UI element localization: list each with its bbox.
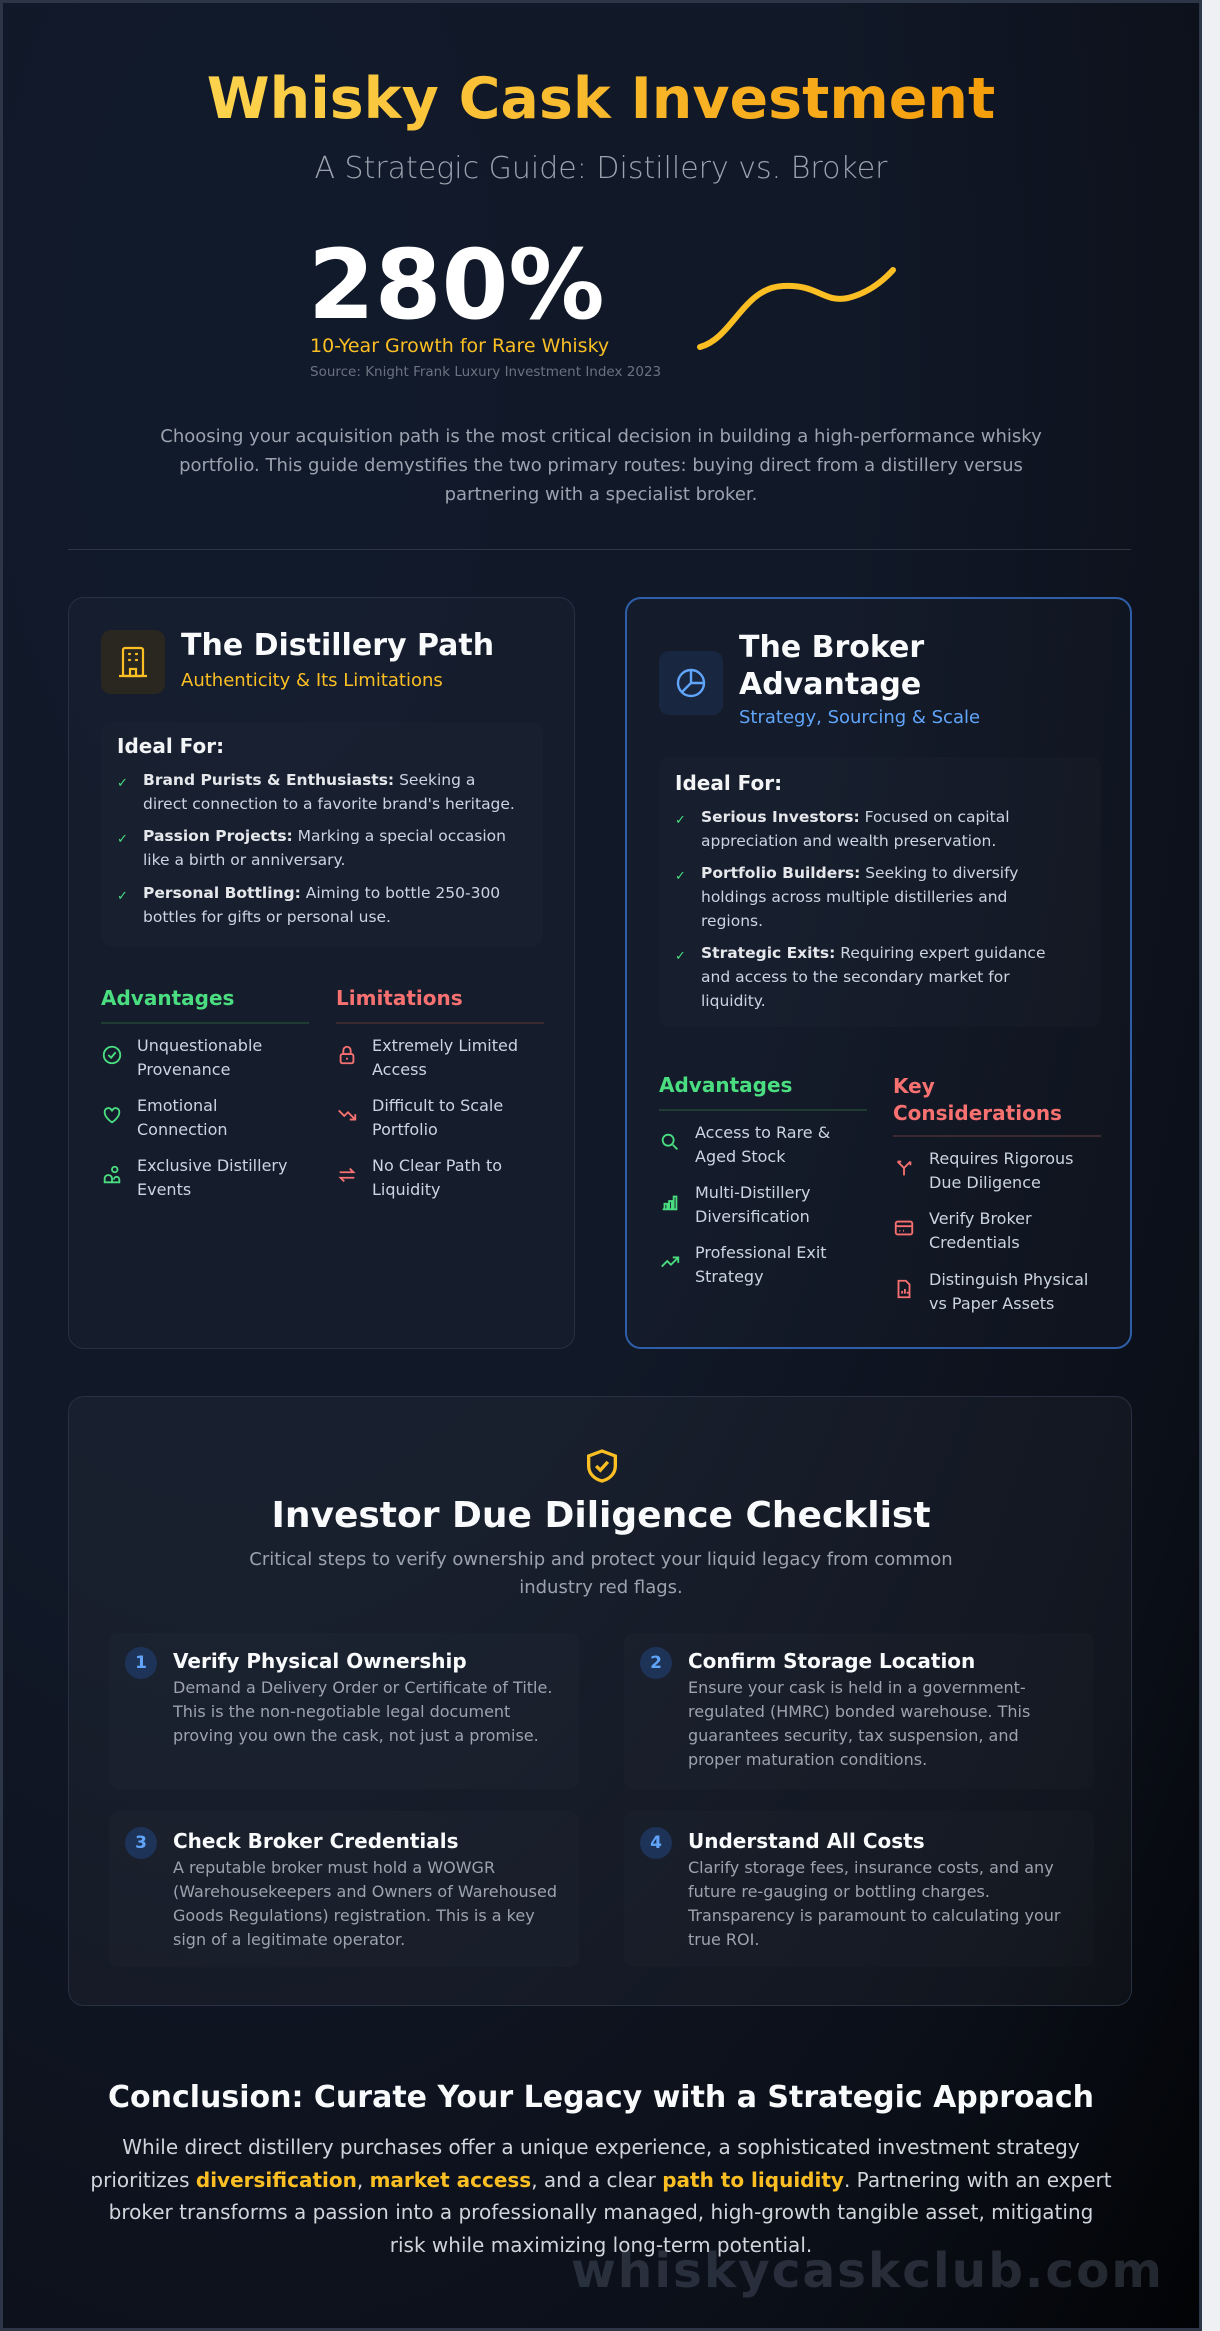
intro paragraph — [160, 426, 1042, 505]
conclusion text: risk while maximizing long-term potential. — [390, 2232, 812, 2256]
key considerations column: Due Diligence — [929, 1173, 1041, 1192]
panel: due diligence checklist: industry red flags. — [519, 1577, 683, 1598]
chart: growth line — [697, 267, 896, 350]
panel: broker advantage — [625, 597, 1132, 1349]
advantages column: Aged Stock — [695, 1147, 785, 1166]
step 1: proving you own the cask, not just a promise. — [173, 1726, 539, 1745]
key considerations column: Credentials — [929, 1233, 1020, 1252]
conclusion heading: Conclusion: Curate Your Legacy with a Strategic Approach — [108, 2080, 1094, 2115]
advantages column — [101, 986, 309, 1199]
step 4: 4 — [650, 1833, 662, 1853]
limitations column: Liquidity — [372, 1180, 440, 1199]
conclusion text: While direct distillery purchases offer a unique experience, a sophisticated investment strategy — [122, 2135, 1080, 2159]
ideal for box: ✓ — [675, 949, 686, 964]
conclusion text — [90, 2135, 1112, 2256]
step 2 — [624, 1633, 1094, 1789]
ideal for box: Passion Projects: Marking a special occasion — [143, 827, 506, 845]
advantages column: Unquestionable — [137, 1036, 262, 1055]
advantages column: Access to Rare & — [695, 1123, 830, 1142]
advantages column — [659, 1073, 867, 1286]
ideal for box: ✓ — [117, 832, 128, 847]
step 2: proper maturation conditions. — [688, 1750, 927, 1769]
step 4 — [624, 1811, 1094, 1967]
key considerations column: Verify Broker — [929, 1209, 1032, 1228]
advantages column: Provenance — [137, 1060, 230, 1079]
step 2: guarantees security, tax suspension, and — [688, 1726, 1019, 1745]
limitations column: Extremely Limited — [372, 1036, 518, 1055]
key considerations column: vs Paper Assets — [929, 1294, 1054, 1313]
step 3: A reputable broker must hold a WOWGR — [173, 1858, 495, 1877]
advantages column: Advantages — [659, 1073, 792, 1097]
advantages column: Advantages — [101, 986, 234, 1010]
limitations column: Access — [372, 1060, 427, 1079]
ideal for box: like a birth or anniversary. — [143, 851, 345, 869]
advantages column: Emotional — [137, 1096, 217, 1115]
ideal for box: Strategic Exits: Requiring expert guidance — [701, 944, 1045, 962]
ideal for box: liquidity. — [701, 992, 766, 1010]
icon: building — [101, 630, 165, 694]
intro paragraph: portfolio. This guide demystifies the two primary routes: buying direct from a distillery versus — [179, 455, 1023, 476]
ideal for box — [659, 757, 1101, 1027]
key considerations column — [893, 1074, 1101, 1313]
step 4: true ROI. — [688, 1930, 759, 1949]
ideal for box: Ideal For: — [675, 771, 782, 795]
ideal for box: ✓ — [675, 813, 686, 828]
step 2: Ensure your cask is held in a government- — [688, 1678, 1026, 1697]
step 4: Understand All Costs — [688, 1829, 925, 1853]
conclusion text: broker transforms a passion into a professionally managed, high-growth tangible asset, mitigating — [109, 2200, 1093, 2224]
stat: 280% — [308, 229, 661, 380]
stat: 280%: 10-Year Growth for Rare Whisky — [310, 335, 609, 357]
ideal for box: direct connection to a favorite brand's heritage. — [143, 795, 515, 813]
step 3: 3 — [135, 1833, 147, 1853]
heading — [739, 630, 924, 702]
step 4: Clarify storage fees, insurance costs, and any — [688, 1858, 1054, 1877]
limitations column: No Clear Path to — [372, 1156, 502, 1175]
step 3: (Warehousekeepers and Owners of Warehoused — [173, 1882, 557, 1901]
heading: The Broker — [739, 630, 924, 665]
advantages column: Strategy — [695, 1267, 764, 1286]
step 1 — [109, 1633, 579, 1789]
advantages column: Professional Exit — [695, 1243, 827, 1262]
stat: 280%: 280% — [308, 229, 605, 341]
subtitle: A Strategic Guide: Distillery vs. Broker — [314, 151, 888, 186]
heading: Advantage — [739, 667, 921, 702]
step 4: future re-gauging or bottling charges. — [688, 1882, 990, 1901]
title: Whisky Cask Investment — [207, 66, 995, 132]
ideal for box: and access to the secondary market for — [701, 968, 1010, 986]
icon: shield — [587, 1449, 617, 1483]
step 4: Transparency is paramount to calculating your — [688, 1906, 1060, 1925]
limitations column: Portfolio — [372, 1120, 438, 1139]
panel: broker advantage: Strategy, Sourcing & Scale — [739, 707, 980, 728]
ideal for box: appreciation and wealth preservation. — [701, 832, 996, 850]
ideal for box: holdings across multiple distilleries and — [701, 888, 1007, 906]
ideal for box: ✓ — [117, 889, 128, 904]
heading: Investor Due Diligence Checklist — [271, 1495, 931, 1536]
panel: due diligence checklist: Critical steps to verify ownership and protect your liquid legacy from common — [249, 1549, 953, 1570]
ideal for box: Ideal For: — [117, 734, 224, 758]
advantages column: Connection — [137, 1120, 228, 1139]
icon: pie chart — [659, 651, 723, 715]
advantages column: Diversification — [695, 1207, 810, 1226]
advantages column: Exclusive Distillery — [137, 1156, 287, 1175]
advantages column: Events — [137, 1180, 191, 1199]
ideal for box: bottles for gifts or personal use. — [143, 908, 391, 926]
stat: 280%: Source: Knight Frank Luxury Investment Index 2023 — [310, 364, 661, 380]
ideal for box — [101, 722, 543, 946]
step 3: Check Broker Credentials — [173, 1829, 458, 1853]
ideal for box: regions. — [701, 912, 763, 930]
panel: distillery path: Authenticity & Its Limitations — [181, 670, 443, 691]
watermark: whiskycaskclub.com — [571, 2243, 1164, 2299]
key considerations column: Considerations — [893, 1101, 1062, 1125]
intro paragraph: partnering with a specialist broker. — [445, 484, 757, 505]
limitations column: Difficult to Scale — [372, 1096, 503, 1115]
ideal for box: Brand Purists & Enthusiasts: Seeking a — [143, 771, 475, 789]
step 1: Verify Physical Ownership — [173, 1649, 467, 1673]
ideal for box: ✓ — [117, 776, 128, 791]
heading: The Distillery Path — [181, 628, 494, 663]
step 1: This is the non-negotiable legal document — [173, 1702, 510, 1721]
panel: due diligence checklist — [68, 1396, 1132, 2006]
key considerations column: Distinguish Physical — [929, 1270, 1088, 1289]
conclusion text: prioritizes diversification, market access, and a clear path to liquidity. Partnering with an expert — [90, 2168, 1112, 2192]
ideal for box: ✓ — [675, 869, 686, 884]
advantages column: Multi-Distillery — [695, 1183, 810, 1202]
step 3 — [109, 1811, 579, 1967]
intro paragraph: Choosing your acquisition path is the most critical decision in building a high-performance whisky — [160, 426, 1042, 447]
ideal for box: Portfolio Builders: Seeking to diversify — [701, 864, 1018, 882]
key considerations column: Requires Rigorous — [929, 1149, 1073, 1168]
ideal for box: Serious Investors: Focused on capital — [701, 808, 1010, 826]
step 3: Goods Regulations) registration. This is a key — [173, 1906, 535, 1925]
step 3: sign of a legitimate operator. — [173, 1930, 405, 1949]
step 1: Demand a Delivery Order or Certificate of Title. — [173, 1678, 552, 1697]
step 2: Confirm Storage Location — [688, 1649, 975, 1673]
key considerations column: Key — [893, 1074, 935, 1098]
ideal for box: Personal Bottling: Aiming to bottle 250-300 — [143, 884, 500, 902]
panel: distillery path — [68, 597, 575, 1349]
step 1: 1 — [135, 1653, 147, 1673]
step 2: 2 — [650, 1653, 662, 1673]
step 2: regulated (HMRC) bonded warehouse. This — [688, 1702, 1030, 1721]
limitations column: Limitations — [336, 986, 463, 1010]
limitations column — [336, 986, 544, 1199]
